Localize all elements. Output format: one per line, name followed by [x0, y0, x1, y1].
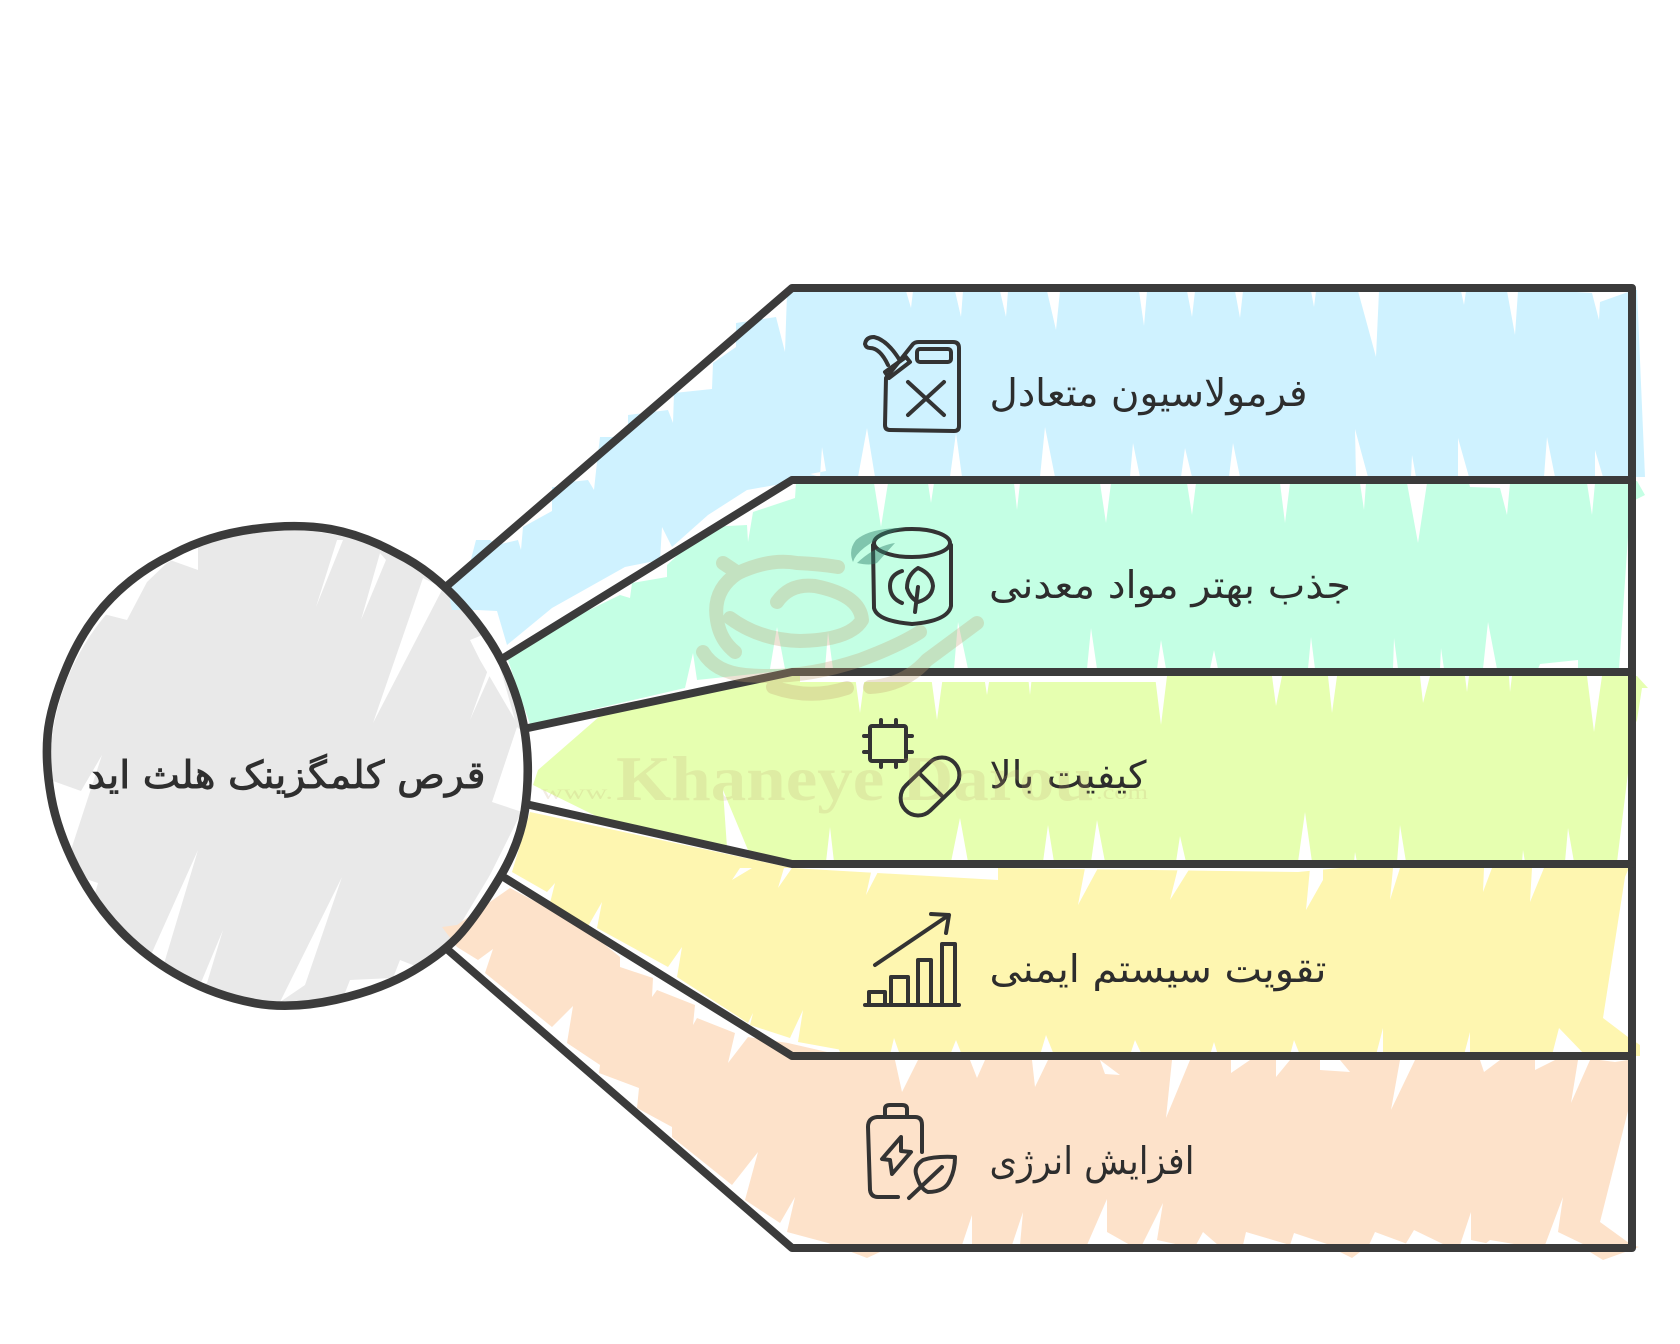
- watermark: logo and site name: Khaneye Darou: [616, 743, 1094, 814]
- icon: battery and leaf: [868, 1105, 955, 1198]
- label: better mineral absorption: جذب بهتر مواد معدنی: [989, 563, 1351, 608]
- panel: band 2 green: [508, 481, 1645, 724]
- icon: cylinder with leaf: [873, 529, 951, 624]
- panel: band 3 lime: [533, 676, 1648, 862]
- icon: chip and capsule: [864, 720, 967, 823]
- panel: band 1 blue: [448, 290, 1645, 645]
- circle outline: [47, 526, 528, 1006]
- label: energy boost: افزایش انرژی: [990, 1139, 1194, 1184]
- panel: band 5 peach: [442, 888, 1639, 1260]
- watermark: logo and site name: www.: [541, 782, 613, 804]
- connector outlines: [448, 288, 1632, 1248]
- label: immune system support: تقویت سیستم ایمنی: [990, 947, 1326, 992]
- heading: central label: قرص کلمگزینک هلث اید: [88, 753, 486, 798]
- label: high quality: کیفیت بالا: [990, 753, 1147, 797]
- circle fill: hand-hatched grey: [50, 530, 532, 1006]
- label: balanced formulation: فرمولاسیون متعادل: [990, 371, 1308, 416]
- watermark: logo and site name: .com: [1096, 782, 1149, 804]
- panel: band 4 yellow: [512, 812, 1640, 1056]
- icon: rising bar chart: [865, 914, 959, 1005]
- watermark: logo and site name: [541, 528, 1149, 814]
- icon: jerry can: [865, 337, 959, 431]
